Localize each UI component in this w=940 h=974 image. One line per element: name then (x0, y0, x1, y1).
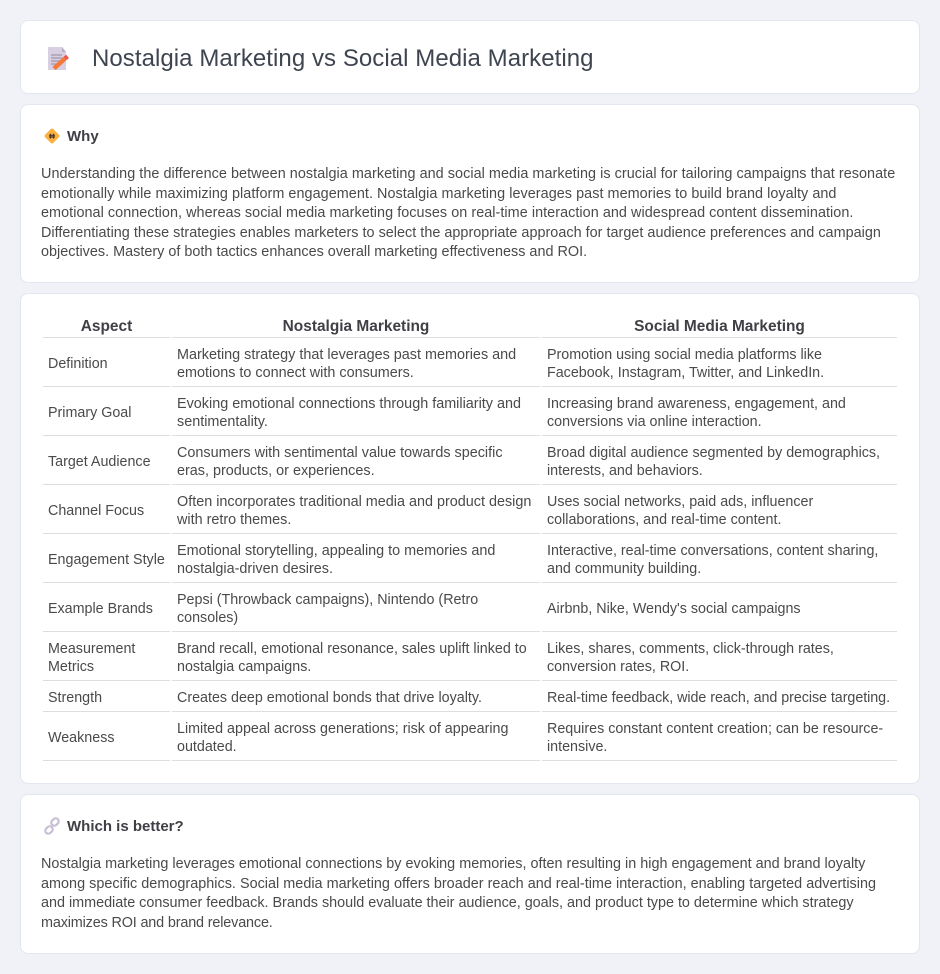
text: which is better paragraph: maximizes ROI and brand relevance. (41, 915, 273, 931)
row: target audience: interests, and behaviors. (547, 463, 703, 479)
text: why paragraph: emotionally while maximizing platform engagement. Nostalgia marketing leverages past memories to build brand loyalty and (41, 186, 836, 202)
row: definition: Facebook, Instagram, Twitter, and LinkedIn. (547, 365, 824, 381)
row: example brands: Airbnb, Nike, Wendy's social campaigns (547, 601, 801, 617)
panel: comparison table (20, 293, 920, 784)
row: measurement metrics: Metrics (48, 659, 94, 675)
row: channel focus: Uses social networks, paid ads, influencer (547, 494, 813, 510)
heading: which is better: Which is better? (67, 818, 184, 835)
text: why paragraph (41, 166, 895, 260)
row: measurement metrics: conversion rates, ROI. (547, 659, 689, 675)
icon: link (44, 817, 60, 835)
row: target audience: eras, products, or experiences. (177, 463, 375, 479)
row: measurement metrics: Likes, shares, comments, click-through rates, (547, 641, 834, 657)
row: weakness: Weakness (48, 730, 114, 746)
row: channel focus (48, 494, 814, 528)
text: why paragraph: Differentiating these strategies enables marketers to select the appropriate approach for target audience preferences and campaign (41, 225, 881, 241)
panel: why (20, 104, 920, 283)
row: primary goal: conversions via online interaction. (547, 414, 762, 430)
text: which is better paragraph: and immediate consumer feedback. Brands should evaluate their audience, goals, and product type to determine which strategy (41, 895, 854, 911)
row: primary goal: Increasing brand awareness, engagement, and (547, 396, 846, 412)
row: definition: Promotion using social media platforms like (547, 347, 822, 363)
row: definition: emotions to connect with consumers. (177, 365, 414, 381)
row: example brands: Example Brands (48, 601, 153, 617)
row: target audience: Target Audience (48, 454, 151, 470)
row: engagement style: Interactive, real-time conversations, content sharing, (547, 543, 878, 559)
panel: header (20, 20, 920, 94)
row: primary goal: Primary Goal (48, 405, 131, 421)
row: target audience: Broad digital audience segmented by demographics, (547, 445, 880, 461)
row: channel focus: collaborations, and real-time content. (547, 512, 781, 528)
table header: Aspect (81, 318, 132, 335)
row: measurement metrics: nostalgia campaigns. (177, 659, 311, 675)
row: target audience: Consumers with sentimental value towards specific (177, 445, 503, 461)
row: primary goal (48, 396, 846, 430)
title: Nostalgia Marketing vs Social Media Marketing (92, 45, 594, 72)
row: channel focus: with retro themes. (177, 512, 291, 528)
row: weakness: Limited appeal across generations; risk of appearing (177, 721, 508, 737)
table header: Nostalgia Marketing (283, 318, 429, 335)
row: engagement style: Emotional storytelling, appealing to memories and (177, 543, 495, 559)
row: target audience (48, 445, 880, 479)
row: engagement style: Engagement Style (48, 552, 165, 568)
row: strength (48, 690, 890, 706)
row: measurement metrics: Measurement (48, 641, 135, 657)
text: why paragraph: emotional connection, whereas social media marketing focuses on real-time interaction and widespread content dissemination. (41, 205, 853, 221)
row: strength: Strength (48, 690, 102, 706)
panel: which is better (20, 794, 920, 954)
row: weakness: Requires constant content creation; can be resource- (547, 721, 883, 737)
text: which is better paragraph (41, 856, 876, 931)
table header: Social Media Marketing (634, 318, 805, 335)
text: why paragraph: objectives. Mastery of both tactics enhances overall marketing effectiveness and ROI. (41, 244, 587, 260)
comparison table (43, 318, 897, 761)
row: primary goal: sentimentality. (177, 414, 268, 430)
row: weakness (48, 721, 883, 755)
icon: memo with pencil (48, 47, 69, 70)
table header (81, 318, 805, 335)
row: strength: Creates deep emotional bonds that drive loyalty. (177, 690, 482, 706)
row: example brands (48, 592, 801, 626)
text: which is better paragraph: among specific demographics. Social media marketing offers broader reach and real-time interaction, enabling targeted advertising (41, 876, 876, 892)
text: why paragraph: Understanding the difference between nostalgia marketing and social media marketing is crucial for tailoring campaigns that resonate (41, 166, 895, 182)
row: strength: Real-time feedback, wide reach, and precise targeting. (547, 690, 890, 706)
row: definition: Marketing strategy that leverages past memories and (177, 347, 516, 363)
row: example brands: consoles) (177, 610, 238, 626)
row: engagement style: nostalgia-driven desires. (177, 561, 333, 577)
row: weakness: outdated. (177, 739, 237, 755)
text: which is better paragraph: Nostalgia marketing leverages emotional connections by evoking memories, often resulting in high engagement and brand loyalty (41, 856, 865, 872)
heading: why: Why (67, 128, 99, 145)
row: measurement metrics: Brand recall, emotional resonance, sales uplift linked to (177, 641, 527, 657)
row: weakness: intensive. (547, 739, 607, 755)
row: engagement style (48, 543, 878, 577)
row: example brands: Pepsi (Throwback campaigns), Nintendo (Retro (177, 592, 478, 608)
row: definition: Definition (48, 356, 108, 372)
row: channel focus: Channel Focus (48, 503, 144, 519)
icon: warning diamond (44, 128, 60, 144)
row: channel focus: Often incorporates traditional media and product design (177, 494, 531, 510)
row: definition (48, 347, 824, 381)
row: measurement metrics (48, 641, 834, 675)
row: engagement style: and community building. (547, 561, 701, 577)
row: primary goal: Evoking emotional connections through familiarity and (177, 396, 521, 412)
